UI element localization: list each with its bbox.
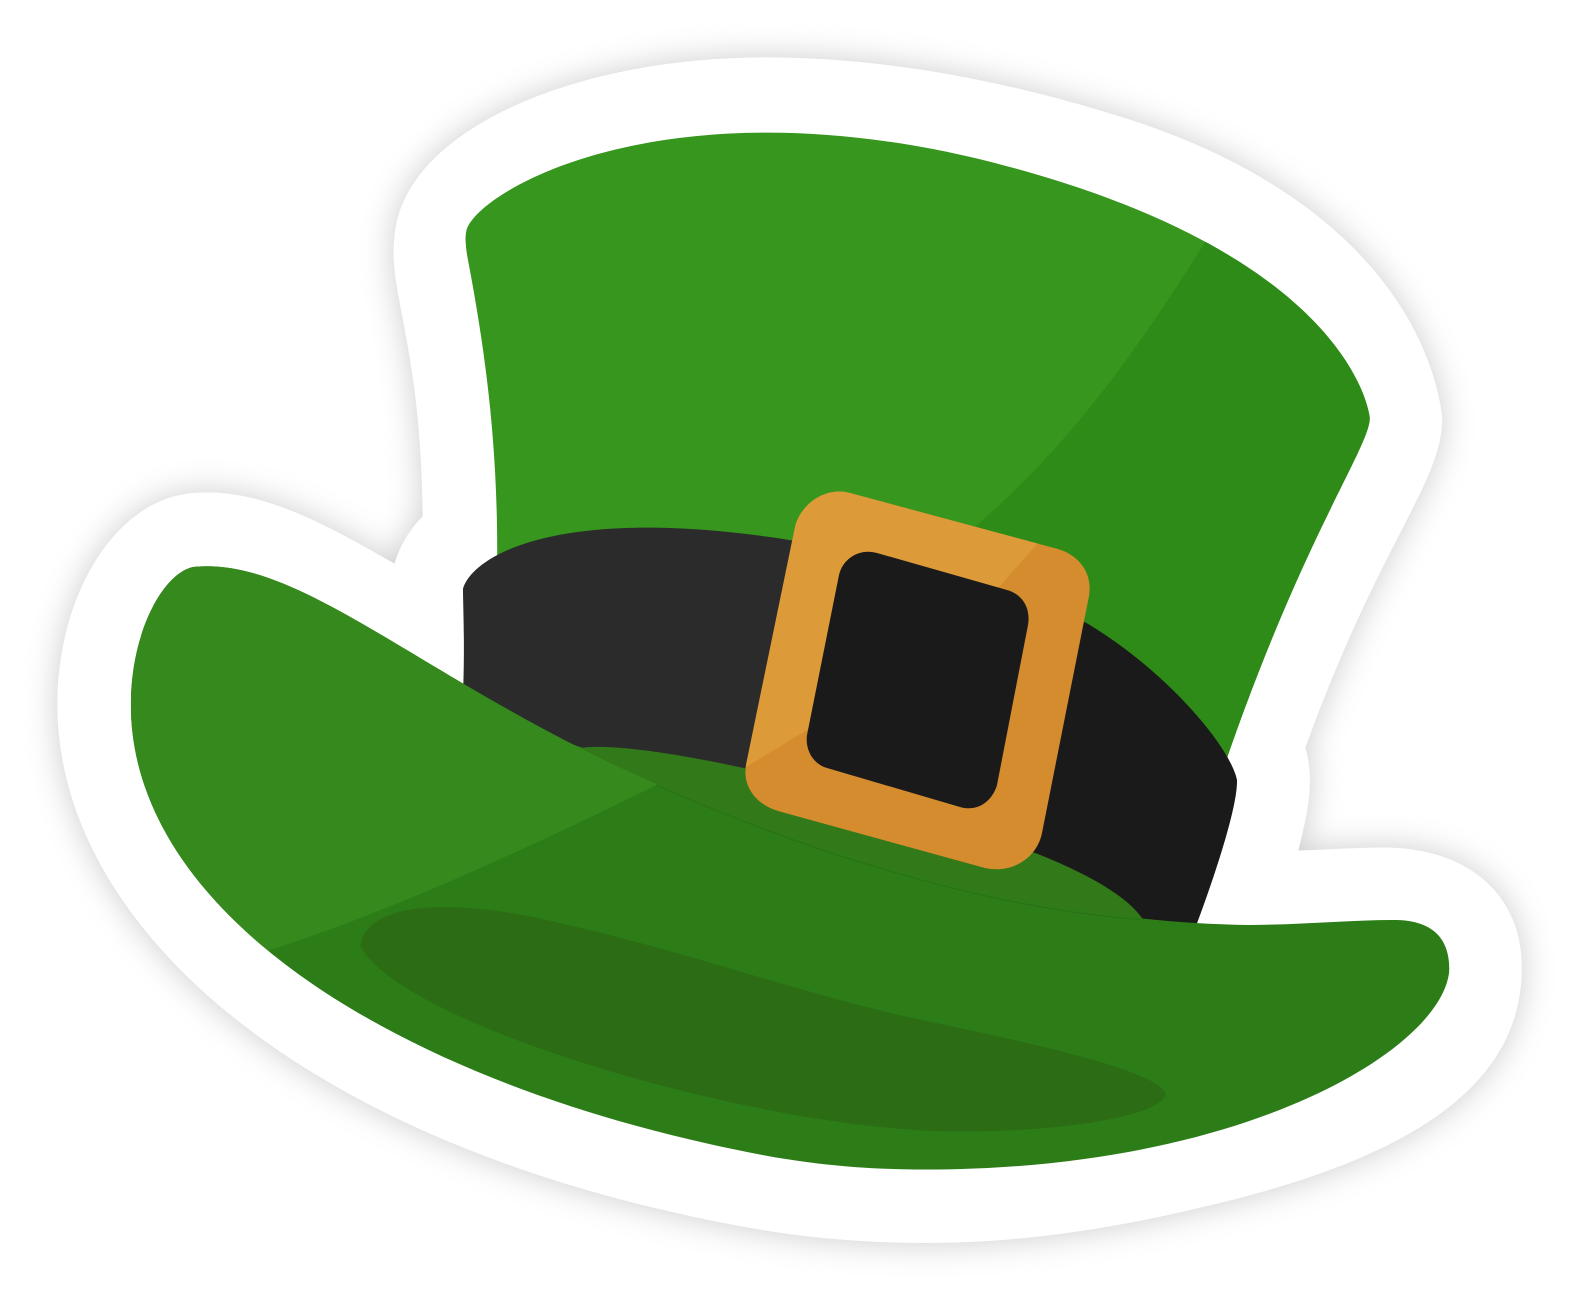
hat crown xyxy=(466,132,1370,758)
gold buckle xyxy=(745,492,1090,870)
brim lit area xyxy=(130,566,657,951)
hat brim xyxy=(130,566,1450,1170)
buckle highlight xyxy=(746,492,1038,767)
buckle opening xyxy=(807,552,1029,808)
band lit side xyxy=(463,528,906,866)
hat band xyxy=(463,528,1237,931)
crown shaded side xyxy=(976,242,1370,758)
brim dark patch xyxy=(360,907,1166,1131)
brim edge line xyxy=(656,785,1144,920)
buckle frame xyxy=(745,492,1090,869)
band shaded side xyxy=(966,612,1237,931)
shadow under band xyxy=(576,747,1144,922)
